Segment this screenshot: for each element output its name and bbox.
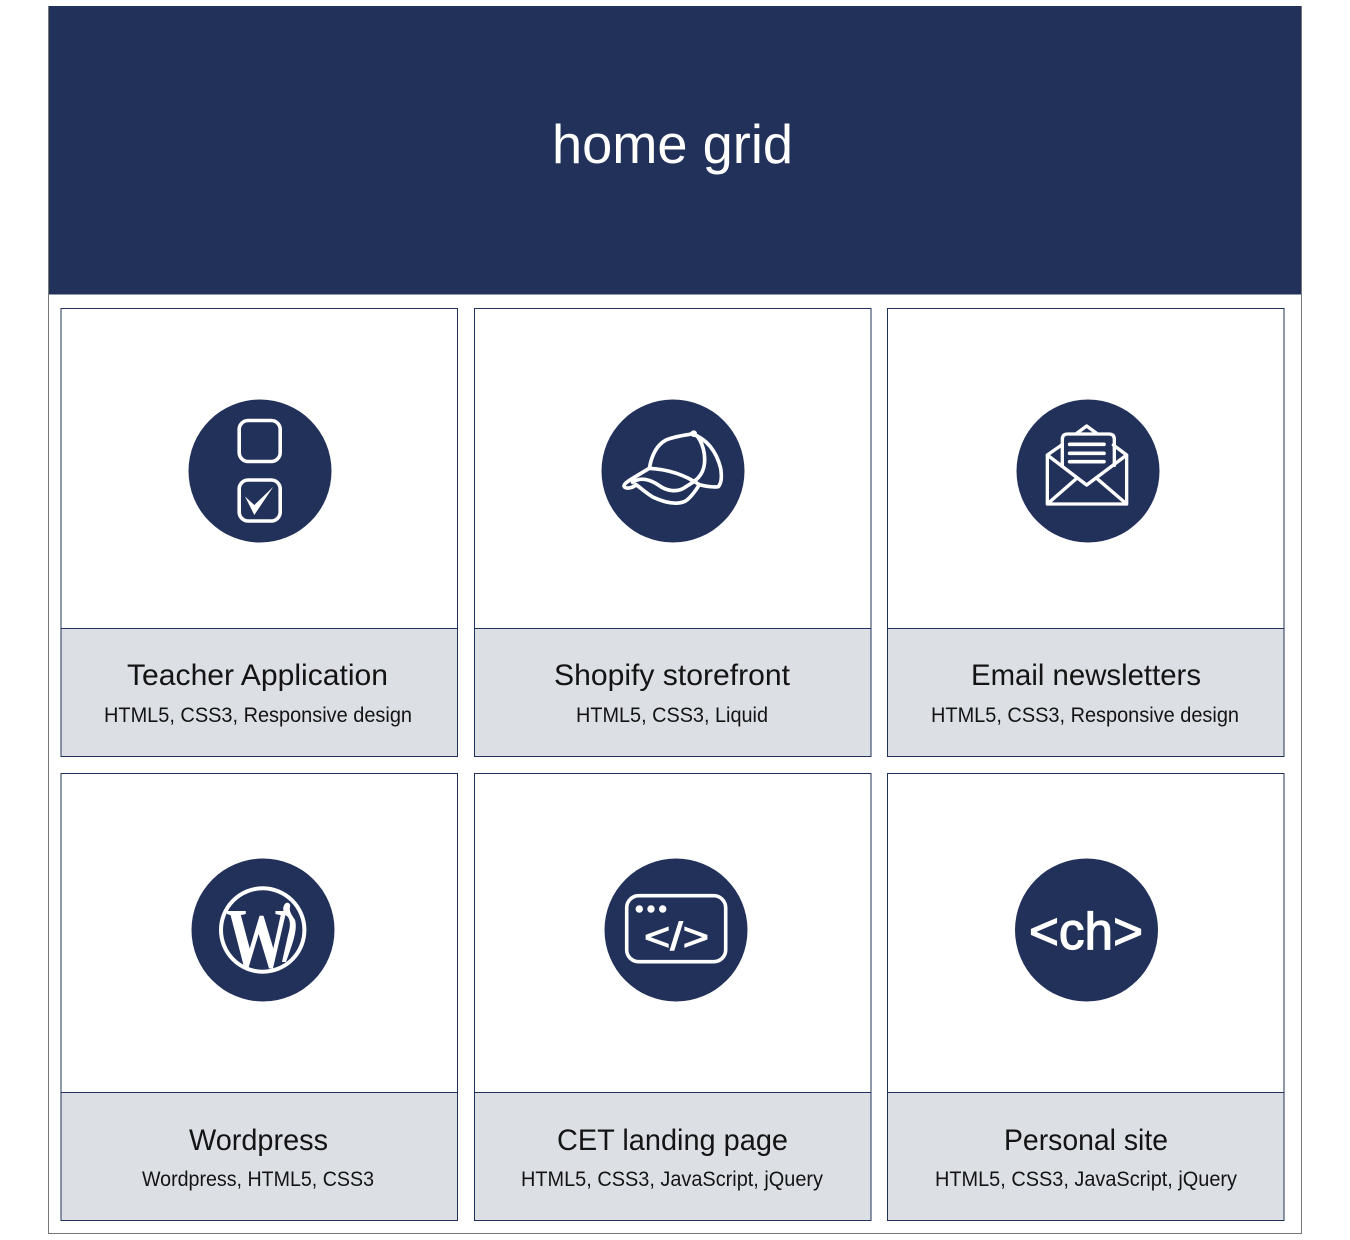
panel: Teacher Application bbox=[61, 308, 458, 756]
icon: ch code mark bbox=[1015, 858, 1158, 1002]
card technologies: HTML5, CSS3, Responsive design bbox=[931, 704, 1239, 727]
card title: Wordpress bbox=[189, 1124, 328, 1157]
card title: Teacher Application bbox=[127, 659, 388, 692]
icon: checklist bbox=[188, 400, 332, 542]
icon: wordpress logo bbox=[192, 858, 334, 1002]
icon: code window bbox=[604, 858, 748, 1002]
panel: Wordpress bbox=[61, 774, 458, 1220]
icon: code window: </> bbox=[644, 916, 709, 959]
panel: Personal site bbox=[888, 774, 1284, 1220]
card title: Personal site bbox=[1004, 1124, 1168, 1157]
card technologies: HTML5, CSS3, JavaScript, jQuery bbox=[935, 1168, 1237, 1191]
card title: Shopify storefront bbox=[554, 659, 791, 692]
card title: Email newsletters bbox=[971, 659, 1201, 692]
icon: envelope bbox=[1016, 400, 1160, 542]
panel: CET landing page bbox=[474, 774, 871, 1220]
title: home grid bbox=[552, 113, 793, 175]
header band bbox=[49, 6, 1301, 294]
panel: Shopify storefront bbox=[474, 308, 871, 756]
icon: cap bbox=[602, 400, 744, 542]
card technologies: HTML5, CSS3, Liquid bbox=[576, 704, 768, 727]
card title: CET landing page bbox=[557, 1124, 788, 1157]
icon: wordpress logo: W bbox=[226, 890, 290, 986]
card technologies: HTML5, CSS3, JavaScript, jQuery bbox=[521, 1168, 823, 1191]
icon: ch code mark: <ch> bbox=[1029, 903, 1143, 961]
card technologies: HTML5, CSS3, Responsive design bbox=[104, 704, 412, 727]
panel: Email newsletters bbox=[888, 308, 1284, 756]
card technologies: Wordpress, HTML5, CSS3 bbox=[142, 1168, 374, 1191]
